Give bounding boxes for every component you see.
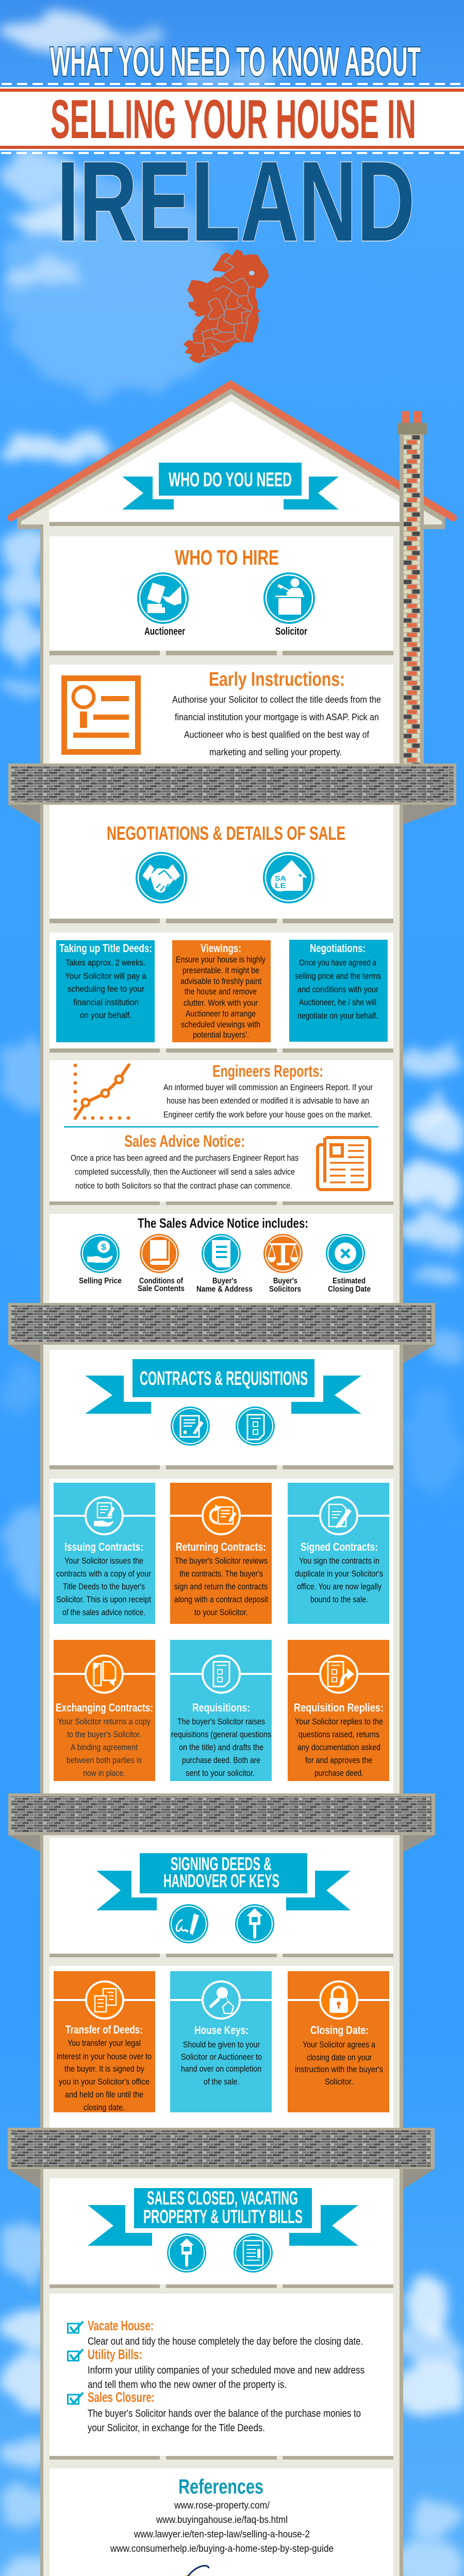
icon: handshake (136, 852, 187, 904)
card: returning contracts: the contracts. The buyer's (179, 1569, 263, 1579)
checklist: utility bills: Inform your utility companies of your scheduled move and new address (88, 2365, 364, 2376)
checklist: utility bills: and tell them who the new owner of the property is. (88, 2379, 287, 2391)
labels: Buyer's (212, 1277, 237, 1285)
card: requisition replies: for and approves the (305, 1755, 372, 1765)
icon: utility bill (234, 2233, 273, 2273)
card: signed contracts: Signed Contracts: (301, 1540, 378, 1553)
labels: Name & Address (196, 1285, 253, 1294)
card: transfer of deeds: you in your Solicitor's office (59, 2077, 150, 2087)
card: issuing contracts: Issuing Contracts: (64, 1540, 143, 1553)
card: transfer of deeds (54, 1971, 155, 2112)
card: requisitions: on the title) and drafts the (179, 1742, 263, 1752)
card: closing date: instruction with the buyer's (295, 2064, 383, 2074)
icon: document magnifier (64, 678, 138, 752)
card: exchanging contracts: A binding agreement (71, 1742, 138, 1752)
panel: taking up title deeds (56, 940, 155, 1042)
card: house keys: Should be given to your (183, 2040, 260, 2049)
card: exchanging contracts: to the buyer's Solicitor. (67, 1730, 141, 1739)
checklist: sales closure (68, 2389, 361, 2434)
heading: NEGOTIATIONS & DETAILS OF SALE (107, 823, 345, 844)
checklist: vacate house: Clear out and tidy the house completely the day before the closing date. (88, 2336, 363, 2347)
icon: scales (263, 1234, 303, 1273)
card: requisition replies (288, 1640, 389, 1781)
body text: An informed buyer will commission an Engineers Report. If your (163, 1082, 373, 1092)
card: closing date: Closing Date: (310, 2024, 369, 2037)
icon: house for sale: SA (275, 874, 286, 882)
body text: Once a price has been agreed and the purchasers Engineer Report has (71, 1153, 299, 1163)
checklist: sales closure: The buyer's Solicitor hands over the balance of the purchase monies to (88, 2408, 361, 2419)
icon: padlock (320, 1981, 357, 2019)
icon: transfer of deeds (86, 1981, 123, 2019)
banner: sales closed (88, 2188, 358, 2246)
icon: conditions of sale (140, 1234, 179, 1273)
panel: viewings: advisable to freshly paint (180, 976, 261, 986)
card: signed contracts: You sign the contracts in (299, 1556, 379, 1566)
card: issuing contracts (54, 1483, 155, 1624)
icon: house for sale: LE (275, 881, 286, 889)
reference links (110, 2500, 334, 2554)
labels: Conditions of (139, 1277, 184, 1285)
card: house keys: House Keys: (194, 2024, 248, 2037)
icon: selling price: $ (101, 1242, 107, 1252)
icon: issuing contracts (86, 1497, 123, 1534)
floor band 3 (8, 1793, 435, 1852)
panel: taking up title deeds: Your Solicitor will pay a (65, 971, 146, 981)
panel: viewings: scheduled viewings with (181, 1020, 260, 1029)
panel: taking up title deeds: on your behalf. (80, 1010, 131, 1020)
labels: Sale Contents (138, 1284, 185, 1293)
labels: Selling Price (79, 1277, 122, 1285)
panel: early instructions (64, 669, 381, 757)
reference links: www.buyingahouse.ie/faq-bs.html (156, 2515, 288, 2526)
panel: notice includes (79, 1215, 371, 1294)
panel: sales advice notice (71, 1132, 370, 1191)
card: transfer of deeds: You transfer your legal (68, 2038, 141, 2048)
body text (172, 694, 381, 757)
heading: Engineers Reports: (212, 1062, 323, 1080)
card: house keys: hand over on completion (181, 2064, 261, 2074)
icon: solicitor (263, 572, 315, 624)
map of Ireland (183, 250, 269, 363)
card: house keys: Solicitor or Auctioneer to (181, 2052, 262, 2062)
heading: Sales Advice Notice: (124, 1132, 245, 1150)
house body walls (40, 401, 403, 2576)
card: exchanging contracts: Your Solicitor returns a copy (58, 1717, 151, 1726)
card: requisitions (170, 1640, 272, 1781)
panel: references (110, 2476, 334, 2576)
banner: who do you need (122, 463, 339, 510)
title band (0, 84, 464, 153)
card: transfer of deeds: and held on file until the (65, 2090, 143, 2099)
panel: negotiations: Negotiations: (310, 942, 366, 955)
labels: Estimated (333, 1277, 366, 1285)
card: closing date: Your Solicitor agrees a (303, 2040, 375, 2049)
chart icon (73, 1063, 130, 1120)
icon: house keys (203, 1981, 240, 2019)
reference links: www.lawyer.ie/ten-step-law/selling-a-house-2 (134, 2529, 310, 2540)
panel: closing checklist (68, 2318, 364, 2434)
card: signed contracts: office. You are now legally (297, 1582, 382, 1591)
card: issuing contracts: Solicitor. This is upon receipt (56, 1595, 151, 1604)
house roof and gable (11, 384, 453, 529)
panel: negotiations (289, 940, 388, 1042)
panel: negotiations: selling price and the terms (295, 971, 381, 981)
panel: viewings (172, 940, 271, 1042)
checklist: sales closure: Sales Closure: (88, 2389, 155, 2405)
body text: Engineer certify the work before your house goes on the market. (163, 1110, 372, 1120)
banner: signing deeds: SIGNING DEEDS & (171, 1853, 272, 1874)
banner: who do you need: WHO DO YOU NEED (169, 469, 292, 491)
card: exchanging contracts: now in place. (83, 1768, 125, 1778)
card: returning contracts: to your Solicitor. (194, 1607, 248, 1617)
icon: contract and pen (171, 1406, 210, 1446)
checklist: utility bills: Utility Bills: (88, 2347, 142, 2362)
card: exchanging contracts (54, 1640, 155, 1781)
panel: negotiations: Auctioneer, he / she will (299, 997, 376, 1007)
floor band 2 (8, 1303, 435, 1363)
heading: References (178, 2476, 263, 2498)
banner: sales closed: SALES CLOSED, VACATING (147, 2188, 298, 2209)
card: closing date (288, 1971, 389, 2112)
icon: auctioneer (137, 572, 189, 624)
card: exchanging contracts: between both parties is (67, 1755, 142, 1765)
body text: marketing and selling your property. (209, 747, 342, 757)
icon: selling price (80, 1234, 120, 1273)
card: requisition replies: any documentation asked (297, 1742, 380, 1752)
reference links: www.consumerhelp.ie/buying-a-home-step-by-step-guide (110, 2544, 334, 2554)
reference links: www.rose-property.com/ (174, 2500, 270, 2511)
floor band 4 (8, 2128, 435, 2189)
card: issuing contracts: contracts with a copy of your (56, 1569, 151, 1579)
rule (64, 1126, 378, 1127)
body text: Auctioneer who is best qualified on the best way of (184, 730, 370, 740)
icon: requisition replies (320, 1656, 357, 1693)
card: requisition replies: questions raised, returns (299, 1730, 379, 1739)
panel: who to hire (137, 546, 315, 637)
card: signed contracts: bound to the sale. (310, 1595, 368, 1604)
checklist: vacate house (68, 2318, 363, 2347)
body text: financial institution your mortgage is with ASAP. Pick an (175, 712, 379, 722)
checklist: sales closure: your Solicitor, in exchange for the Title Deeds. (88, 2422, 265, 2434)
icon: house key (235, 1904, 274, 1943)
card: signed contracts (288, 1483, 389, 1624)
card: requisitions: The buyer's Solicitor raises (177, 1717, 265, 1726)
card: closing date: Solicitor. (325, 2077, 353, 2087)
icon: name and address (202, 1234, 241, 1273)
heading: The Sales Advice Notice includes: (138, 1215, 308, 1231)
heading: Early Instructions: (209, 669, 345, 690)
card: requisitions: sent to your solicitor. (186, 1768, 255, 1778)
card: issuing contracts: Your Solicitor issues the (64, 1556, 143, 1566)
card: returning contracts: along with a contract deposit (174, 1595, 268, 1604)
panel: viewings: potential buyers'. (193, 1030, 249, 1040)
banner: sales closed: PROPERTY & UTILITY BILLS (143, 2206, 303, 2227)
body text (163, 1082, 373, 1120)
icon: house for sale (263, 852, 314, 904)
body text (71, 1153, 299, 1191)
card: returning contracts (170, 1483, 272, 1624)
card: returning contracts: sign and return the contracts (174, 1582, 268, 1591)
labels: Solicitors (269, 1285, 301, 1294)
card: requisitions: Requisitions: (192, 1701, 250, 1714)
icon: vacate key (167, 2233, 206, 2273)
labels: Closing Date (328, 1285, 371, 1294)
icon: requisition checklist (236, 1406, 275, 1446)
banner: contracts and requisitions: CONTRACTS & REQUISITIONS (140, 1368, 308, 1389)
body text: notice to both Solicitors so that the contract phase can commence. (75, 1181, 292, 1191)
card: requisitions: purchase deed. Both are (182, 1755, 260, 1765)
card: issuing contracts: Title Deeds to the buyer's (63, 1582, 145, 1591)
panel: viewings: the house and remove (185, 987, 257, 996)
card: requisitions: requisitions (general questions (171, 1730, 271, 1739)
panel: viewings: Viewings: (201, 942, 241, 955)
panel: negotiations: and conditions with your (297, 985, 378, 994)
card: requisition replies: purchase deed. (314, 1768, 363, 1778)
panel: negotiations: Once you have agreed a (299, 958, 376, 968)
icon: exchanging contracts (86, 1656, 123, 1693)
card: closing date: closing date on your (307, 2053, 372, 2062)
card: returning contracts: The buyer's Solicitor reviews (175, 1556, 268, 1566)
label: solicitor: Solicitor (275, 626, 307, 637)
icon: newspaper (318, 1138, 370, 1190)
card: exchanging contracts: Exchanging Contracts: (56, 1701, 153, 1714)
heading: WHO TO HIRE (175, 546, 279, 569)
panel: taking up title deeds: Takes approx. 2 weeks. (65, 958, 145, 968)
panel: taking up title deeds: Taking up Title Deeds: (59, 942, 152, 955)
checklist: utility bills (68, 2347, 364, 2391)
body text: completed successfully, then the Auctioneer will send a sales advice (75, 1167, 295, 1177)
panel: negotiations: negotiate on your behalf. (297, 1011, 378, 1021)
icon: signature pen (169, 1904, 208, 1943)
icon: signed contracts (320, 1497, 357, 1534)
card: requisition replies: Requisition Replies: (294, 1701, 384, 1714)
icon: closing date (326, 1234, 365, 1273)
panel: engineers reports (73, 1062, 373, 1120)
card: transfer of deeds: Transfer of Deeds: (65, 2023, 143, 2036)
logo: Rose Property Services (158, 2566, 289, 2576)
card: requisition replies: Your Solicitor replies to the (295, 1717, 383, 1726)
chimney (397, 411, 427, 764)
checklist: vacate house: Vacate House: (88, 2318, 154, 2333)
label: auctioneer: Auctioneer (144, 626, 185, 637)
panel: viewings: Ensure your house is highly (176, 955, 266, 964)
panel: taking up title deeds: financial institution (73, 997, 139, 1007)
body text: house has been extended or modified it is advisable to have an (167, 1096, 369, 1106)
icon: returning contracts (203, 1497, 240, 1534)
panel: viewings: clutter. Work with your (184, 998, 258, 1008)
card: transfer of deeds: closing date. (84, 2103, 125, 2112)
card: house keys: of the sale. (204, 2077, 239, 2087)
panel: viewings: presentable. It might be (183, 965, 259, 975)
panel: negotiations heading (107, 823, 345, 904)
panel: viewings: Auctioneer to arrange (186, 1009, 256, 1019)
labels (79, 1277, 371, 1294)
card: transfer of deeds: interest in your house over to (57, 2052, 152, 2061)
card: returning contracts: Returning Contracts: (176, 1540, 266, 1553)
card: house keys (170, 1971, 272, 2112)
floor band 1 (8, 764, 456, 824)
card: signed contracts: duplicate in your Solicitor's (295, 1569, 383, 1579)
banner: signing deeds (96, 1853, 351, 1910)
banner: signing deeds: HANDOVER OF KEYS (163, 1870, 279, 1891)
card: issuing contracts: of the sales advice notice. (62, 1607, 145, 1617)
icon: requisitions (203, 1656, 240, 1693)
body text: Authorise your Solicitor to collect the title deeds from the (172, 694, 381, 705)
labels: Buyer's (273, 1277, 297, 1285)
banner: contracts and requisitions (85, 1359, 361, 1414)
panel: taking up title deeds: scheduling fee to your (68, 984, 144, 994)
card: transfer of deeds: the buyer. It is signed by (64, 2064, 144, 2074)
